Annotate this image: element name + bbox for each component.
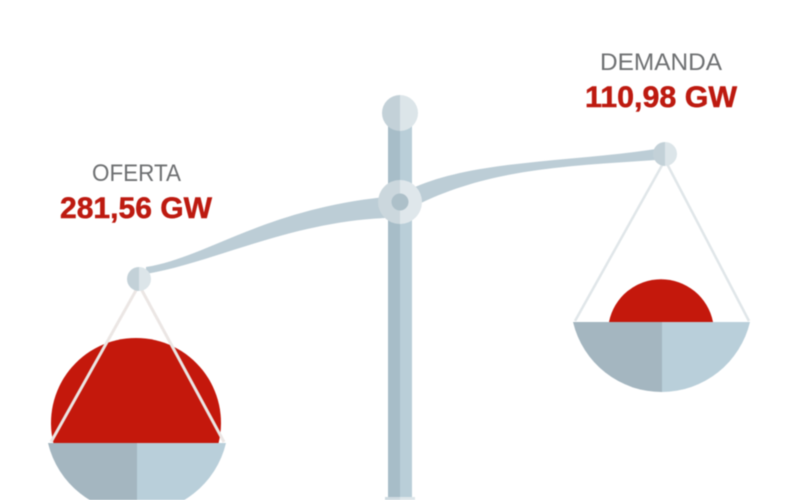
right pan group (573, 142, 750, 392)
top knob (382, 95, 418, 131)
central hub (378, 180, 422, 224)
central pole (385, 120, 415, 500)
left pan group (48, 267, 226, 500)
right strings (575, 160, 749, 321)
left red mass (51, 338, 221, 443)
left strings (51, 285, 224, 442)
label: demanda: DEMANDA (600, 49, 722, 76)
label: oferta: OFERTA (92, 160, 181, 187)
beam (146, 149, 656, 274)
value: oferta 281,56 GW: 281,56 GW (60, 192, 213, 225)
left pivot (127, 267, 151, 291)
right pan (573, 322, 750, 392)
right red mass (609, 279, 713, 322)
value: demanda 110,98 GW: 110,98 GW (585, 81, 738, 114)
left pan (48, 443, 226, 500)
right pivot (653, 142, 677, 166)
